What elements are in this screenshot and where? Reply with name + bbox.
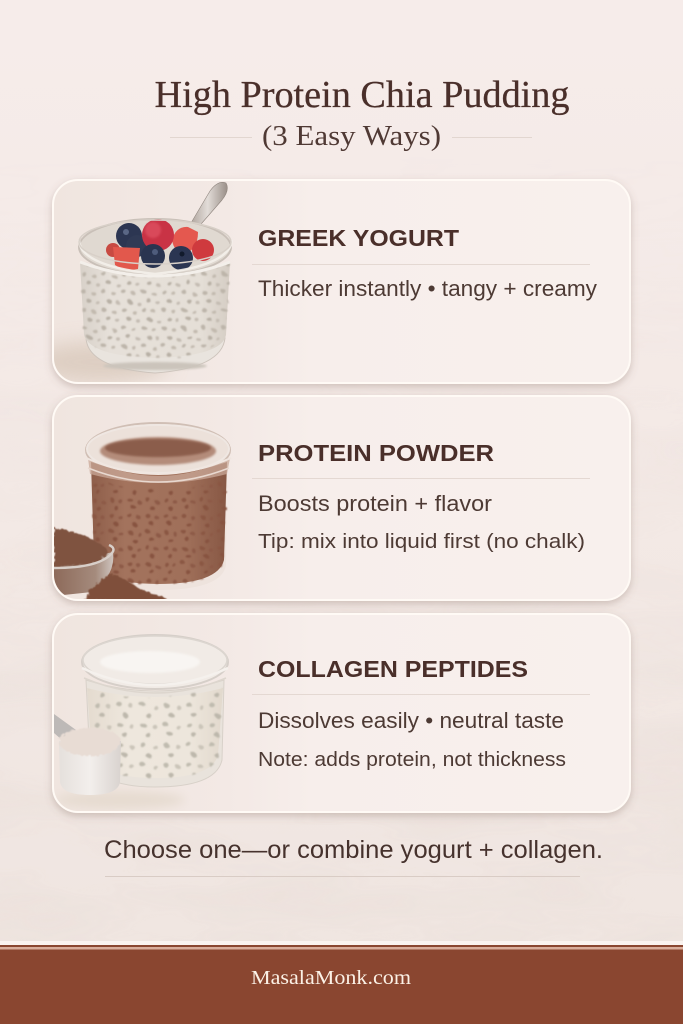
description: Dissolves easily • neutral taste <box>258 708 564 733</box>
glass back <box>79 219 231 275</box>
photo: yogurt chia jar with berries <box>54 182 232 382</box>
subtitle with rules: (3 Easy Ways) <box>262 121 441 152</box>
scoop <box>54 714 76 740</box>
jar <box>82 635 228 689</box>
photo: chocolate chia jar with powder bowl <box>54 423 231 602</box>
spoon <box>192 182 228 224</box>
photo: collagen chia jar with scoop <box>54 635 228 809</box>
pudding body <box>80 262 230 358</box>
footer band <box>0 941 683 1024</box>
description: Thicker instantly • tangy + creamy <box>258 276 597 301</box>
front rim <box>79 240 232 274</box>
description: Boosts protein + flavor <box>258 491 492 516</box>
heading: PROTEIN POWDER <box>258 440 494 466</box>
closing line: Choose one—or combine yogurt + collagen. <box>104 836 603 864</box>
spilled powder <box>55 791 185 809</box>
bowl of powder <box>54 552 113 596</box>
title: High Protein Chia Pudding <box>154 74 570 116</box>
panel: greek yogurt <box>30 180 630 383</box>
glass base <box>86 338 225 373</box>
heading: GREEK YOGURT <box>258 225 459 251</box>
note: Note: adds protein, not thickness <box>258 749 566 771</box>
heading: COLLAGEN PEPTIDES <box>258 656 528 682</box>
berries <box>106 219 214 270</box>
panel: protein powder <box>53 396 630 602</box>
jar <box>86 423 230 477</box>
panel: collagen peptides <box>53 614 630 812</box>
powder on top <box>100 437 216 465</box>
background <box>0 732 683 941</box>
spilled powder <box>84 574 166 602</box>
website: MasalaMonk.com <box>251 967 411 989</box>
tip: Tip: mix into liquid first (no chalk) <box>258 531 585 553</box>
